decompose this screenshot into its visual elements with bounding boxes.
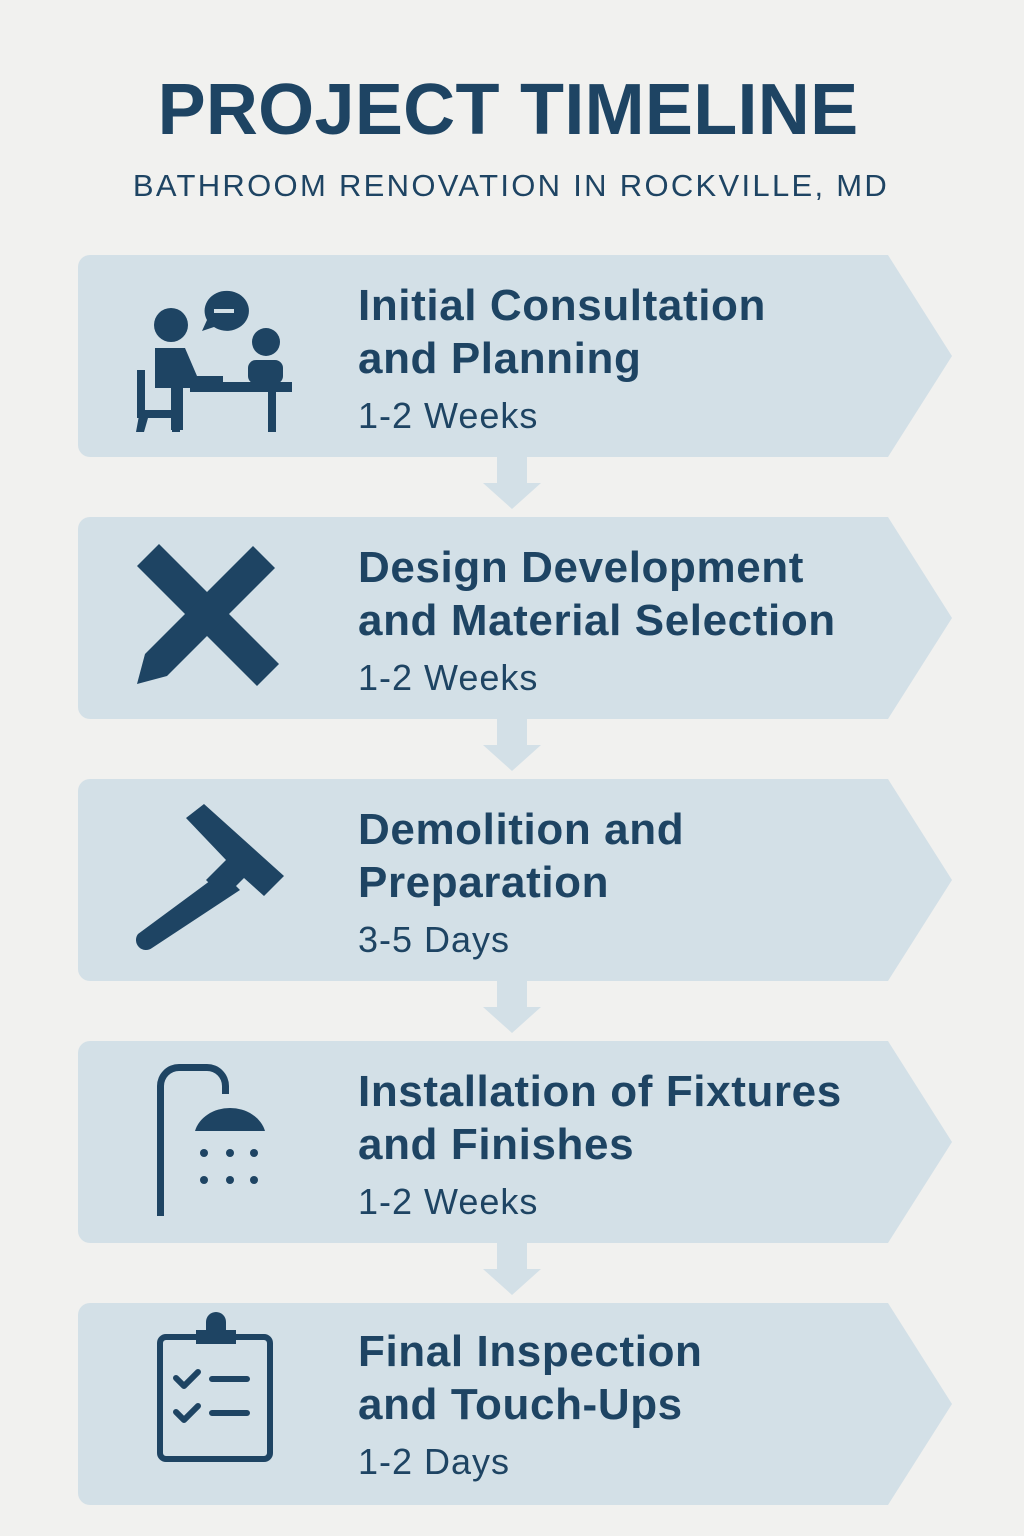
- panel: step 2 design: [78, 517, 952, 719]
- icon: consultation: [136, 291, 292, 432]
- text: step 1: and Planning: [358, 334, 641, 383]
- connector arrows: [483, 457, 541, 1295]
- panel: step 2 design: 1-2 Weeks: [358, 657, 538, 698]
- title: PROJECT TIMELINE: [158, 70, 858, 150]
- panel: step 4 installation: [78, 1041, 952, 1243]
- panel: step 1 consultation: [78, 255, 952, 457]
- text: step 2: and Material Selection: [358, 596, 836, 645]
- text: step 1: Initial Consultation: [358, 281, 766, 330]
- panel: step 5 inspection: [78, 1303, 952, 1505]
- panel: step 4 installation: 1-2 Weeks: [358, 1181, 538, 1222]
- icon: hammer: [136, 804, 284, 950]
- panel: step 3 demolition: [78, 779, 952, 981]
- subtitle: BATHROOM RENOVATION IN ROCKVILLE, MD: [133, 168, 889, 203]
- text: step 5: and Touch-Ups: [358, 1380, 683, 1429]
- text: step 3: Preparation: [358, 858, 609, 907]
- icon: shower: [157, 1064, 265, 1216]
- panel: step 3 demolition: 3-5 Days: [358, 919, 510, 960]
- text: step 5: Final Inspection: [358, 1327, 703, 1376]
- icon: clipboard: [160, 1337, 270, 1459]
- text: step 4: and Finishes: [358, 1120, 634, 1169]
- text: step 3: Demolition and: [358, 805, 684, 854]
- panel: step 1 consultation: 1-2 Weeks: [358, 395, 538, 436]
- icon: ruler and pencil: [137, 544, 279, 686]
- panel: step 5 inspection: 1-2 Days: [358, 1441, 510, 1482]
- text: step 2: Design Development: [358, 543, 804, 592]
- text: step 4: Installation of Fixtures: [358, 1067, 842, 1116]
